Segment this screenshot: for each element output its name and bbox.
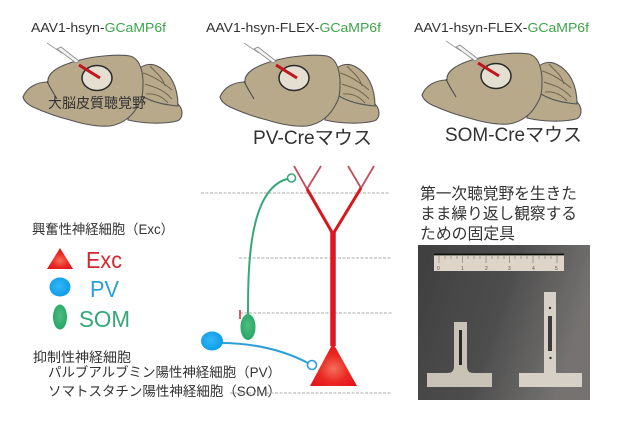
label: virus name 3: AAV1-hsyn-FLEX- GCaMP6f <box>414 21 590 35</box>
brain illustration 3 <box>422 41 581 124</box>
panel: head-plate fixture <box>418 185 590 400</box>
SOM interneuron <box>240 174 296 340</box>
label: virus name 2: AAV1-hsyn-FLEX- GCaMP6f <box>206 21 382 35</box>
long T-shaped fixture <box>519 292 582 387</box>
text: inhibitory neurons: パルブアルブミン陽性神経細胞（PV） <box>48 364 281 380</box>
panel: PV-Cre mouse <box>206 21 382 149</box>
ruler: 3 <box>508 266 511 272</box>
label: auditory cortex: 大脳皮質聴覚野 <box>48 95 146 111</box>
brain illustration 2 <box>220 43 379 126</box>
ruler <box>434 254 564 272</box>
text: fixture description: まま繰り返し観察する <box>420 205 577 223</box>
panel: neuron legend <box>32 222 281 399</box>
short T-shaped fixture <box>427 322 492 387</box>
ruler: 5 <box>555 266 558 272</box>
ruler: 4 <box>532 266 535 272</box>
text: inhibitory neurons: ソマトスタチン陽性神経細胞（SOM） <box>48 384 281 399</box>
text: fixture description: 第一次聴覚野を生きた <box>420 185 577 203</box>
label: SOM: SOM <box>79 306 130 332</box>
brain illustration 1 <box>23 43 182 126</box>
excitatory neuron <box>294 166 374 386</box>
text: inhibitory neurons <box>33 350 281 399</box>
photo: fixtures and ruler <box>418 245 590 400</box>
label: virus name 1: AAV1-hsyn- GCaMP6f <box>31 21 167 35</box>
icon: SOM ellipse <box>53 304 67 330</box>
layer boundaries <box>201 193 392 393</box>
label: PV-Cre mouse: PV-Creマウス <box>253 128 372 149</box>
icon: Exc triangle <box>47 248 73 269</box>
PV interneuron <box>201 332 316 370</box>
chart: cortical circuit diagram <box>201 166 392 393</box>
label: SOM-Cre mouse: SOM-Creマウス <box>445 125 582 146</box>
panel: SOM-Cre mouse <box>414 21 590 146</box>
ruler: 2 <box>485 266 488 272</box>
text: fixture description: ための固定具 <box>420 225 515 243</box>
icon: PV circle <box>50 278 70 296</box>
text: fixture description <box>420 185 577 243</box>
ruler: 1 <box>461 266 464 272</box>
ruler: 0 <box>437 266 440 272</box>
panel: AAV1-hsyn-GCaMP6f injection <box>23 21 182 126</box>
text: inhibitory neurons: 抑制性神経細胞 <box>33 350 132 365</box>
label: Exc: Exc <box>86 247 122 273</box>
heading: excitatory neurons: 興奮性神経細胞（Exc） <box>32 222 174 237</box>
label: PV: PV <box>90 276 120 302</box>
